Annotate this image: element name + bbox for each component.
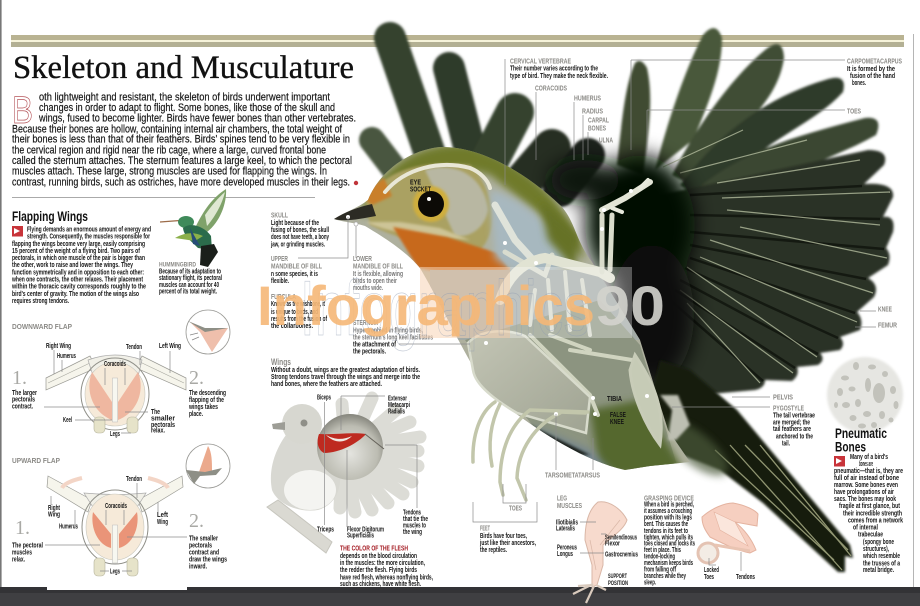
labels: Triceps [317,524,334,534]
note: color of the flesh: in the muscles: the more circulation, [340,558,425,567]
callout: sternum: the attachment of [353,340,396,348]
step 1 text: 1. [15,517,30,539]
callout: skull: fusing of bones, the skull [271,225,329,234]
body text: trabeculae [858,530,883,538]
foot skeletons [473,402,588,500]
labels: Flexor Digitorum [347,524,384,534]
intro paragraph: Because their bones are hollow, containing internal air chambers, the total weight of [12,123,342,135]
label: carpal bones: CARPAL [588,116,609,124]
panel: wings [267,357,433,588]
label: radius: RADIUS [582,106,603,116]
body text: metal bridge. [863,565,894,574]
hummingbird caption: muscles can account for 40 [159,280,219,289]
step 2 text: flapping of the [189,395,224,404]
callout: sternum [353,318,433,356]
callout: carpometacarpus: It is formed by the [847,64,895,73]
body text: bent. This causes the [644,519,688,528]
callout: smaller pectorals: The [151,407,160,416]
body text: branches while they [644,571,686,580]
intro paragraph: called the sternum attaches. The sternum features a large keel, to which the pectoral [12,155,352,167]
body text: tendons in its feet to [644,526,688,535]
labels: Right Wing [46,341,71,350]
hummingbird caption: percent of its total weight. [159,286,217,296]
body text: from falling off [644,564,676,574]
callout: pygostyle: The tail vertebrae [773,410,815,420]
heading: MUSCLES [557,501,582,510]
callout: upper mandible: UPPER [271,254,288,263]
labels: Locked [704,565,719,574]
labels: Toes [704,572,714,581]
callout: skull: Light because of the [271,218,319,227]
intro paragraph: oth lightweight and resistant, the skeleton of birds underwent important [39,92,330,104]
labels: Keel [63,415,72,424]
body text: hand bones, where the feathers are attached. [271,379,382,388]
labels [46,341,181,438]
step 2 text: wings takes [188,402,218,411]
drop cap: B [12,90,33,132]
labels: Peroneus [557,542,577,552]
step 2 text: contract and [189,548,219,556]
sternum [468,331,590,433]
labels: Longus [557,549,573,558]
bottom dark band [0,587,920,606]
main bird illustration [330,28,894,572]
leader lines [580,522,606,553]
body text [271,365,420,388]
callout: carpometacarpus: fusion of the hand [850,71,895,80]
step 1 text: pectorals [12,394,35,404]
intro paragraph: changes in order to adapt to flight. Some bones, like those of the skull and [39,102,335,114]
callout: skull [270,210,329,248]
labels: Left Wing [159,341,181,350]
note: color of the flesh [340,544,433,588]
labels: the wing [403,527,422,536]
labels: Legs [110,566,120,576]
panel: flapping wings [11,189,226,305]
intro paragraph: contrast, running birds, such as ostriches, have more developed muscles in their legs. [12,176,350,188]
callout: smaller pectorals: smaller [151,414,175,422]
note: color of the flesh: have red flesh, whereas nonflying birds, [340,572,433,581]
eye [413,186,449,222]
on-bird labels: FALSE [610,410,626,419]
heading: DOWNWARD FLAP [12,322,72,331]
step 2 text: inward. [189,562,207,570]
icon: arrow [834,456,845,466]
body text: Many of a bird's [850,452,888,461]
labels: SUPPORT [608,573,627,580]
body text: the other, work to raise and lower the wings. They [12,260,134,269]
right page rule [913,34,914,590]
inset: bird in downstroke [186,310,230,354]
heading: Bones [835,440,866,454]
callout text: FEET [480,524,490,532]
callout: cervical vertebrae [510,56,608,80]
callout: smaller pectorals [151,407,175,434]
step 1 text: relax. [12,554,25,564]
labels: Iliotibialis [556,518,578,526]
panel: leg muscles [556,494,638,603]
callout: upper mandible: MANDIBLE OF BILL [271,262,322,270]
labels: Wing [157,517,168,526]
body text: flapping the wings become very large, easily comprising [12,239,145,248]
panel: head callouts [270,210,470,356]
label: ulna: ULNA [599,136,613,144]
callout: upper mandible: flexible. [271,276,289,285]
body text [644,500,695,587]
callout: furcula: results from the fusion of [271,314,327,323]
step 2 text [189,510,227,570]
panel: upward flap [12,444,230,576]
body text: bones are [859,459,873,468]
callout: cervical vertebrae: type of bird. They make the neck flexible. [510,71,608,80]
hummingbird caption: HUMMINGBIRD [159,262,196,268]
label: knee: KNEE [878,304,892,314]
callout text [479,524,536,554]
diagram: upstroke thorax [45,476,187,576]
label: humerus: HUMERUS [574,94,601,102]
left page edge [0,0,2,590]
body text: which resemble [862,551,900,560]
heading: GRASPING DEVICE [644,494,694,502]
step 1 text: 1. [12,367,27,389]
labels: Coracoids [104,359,126,368]
joint markers [346,189,649,416]
note: color of the flesh: the redder the flesh. Flying birds [340,565,417,574]
labels: Right [48,503,60,512]
step 2 text [188,367,226,418]
labels: Biceps [317,392,331,402]
illustration: locked foot [698,503,758,571]
label: carpal bones: BONES [588,124,606,132]
step 2 text: 2. [189,510,204,532]
callout: furcula [271,292,327,330]
heading [835,426,887,454]
labels: Extensor [388,394,407,402]
body text: When a bird is perched, [644,500,694,508]
hummingbird caption: stationary flight, its pectoral [159,273,222,282]
step 1 text: The pectoral [12,540,43,550]
callout: sternum: the pectorals. [353,346,386,356]
panel: grasping device [644,494,758,587]
on-bird labels: SOCKET [410,184,431,194]
body text: tendon-locking [644,552,675,561]
callout: lower mandible [353,254,403,292]
heading: Wings [271,357,291,367]
labels: Semitendinosus [605,532,637,542]
title: Skeleton and Musculature [13,50,354,86]
callout: furcula: FURCULA [271,292,296,301]
top double band [11,35,904,47]
illustration: leg [573,502,627,603]
spine and pelvis teeth [660,395,690,440]
note: color of the flesh: THE COLOR OF THE FLESH [340,544,408,552]
callout: pygostyle: tail. [782,438,790,448]
heading: Flapping Wings [12,209,88,224]
callout: cervical vertebrae: Their number varies according to the [510,64,598,72]
watermark: Infographics [257,274,595,337]
callout text: just like their ancestors, [479,538,536,547]
callout: lower mandible: LOWER [353,254,372,263]
illustration: grey robin with wing [267,398,420,553]
labels: Wing [48,510,60,518]
callout: carpometacarpus [847,56,902,87]
labels: Left [157,510,168,519]
toes bracket: TOES [509,504,522,512]
labels: Legs [110,429,120,438]
body text [11,224,151,305]
labels: muscles to [403,520,426,530]
watermark: Infographics [300,264,590,352]
body text: pectorals, in which one muscle of the pair is bigger than [12,253,145,262]
callout: lower mandible: mouths wide. [353,283,383,292]
on-bird labels: KNEE [610,417,624,426]
labels: that tie the [403,514,428,523]
body text: structures), [863,544,889,553]
callout: upper mandible [271,254,322,285]
intro paragraph: the cervical region and rigid near the rib cage, where a large, curved frontal bone [12,144,326,156]
hummingbird caption: Because of its adaptation to [159,266,221,276]
note: color of the flesh: such as chickens, have white flesh. [340,579,421,588]
labels [317,392,428,540]
labels: Flexor [605,538,620,548]
body text: 15 percent of the weight of a flying bird. Two pairs of [12,246,140,255]
labels: Tendon [126,474,142,483]
callout: furcula: is unique to birds, and [271,307,318,316]
body text: it assumes a crouching [644,506,692,515]
icon: arrow [12,226,23,236]
body text: function symmetrically and in opposition to each other: [12,267,144,276]
main wing feathers [617,28,894,395]
body text: Strong tendons travel through the wings and merge into the [271,372,420,381]
labels: Lateralis [556,524,575,532]
intro paragraph [12,90,356,188]
labels [704,565,755,581]
body text: Without a doubt, wings are the greatest adaptation of birds. [271,365,420,374]
body text [834,452,904,574]
on-bird labels: TIBIA [607,394,622,403]
heading: LEG [557,494,567,502]
callout: pygostyle: anchored to the [776,432,813,440]
body text: mechanism keeps birds [644,558,693,567]
callout: sternum: the sternum's long keel facilitates [353,332,433,342]
body text: sleep. [644,578,656,587]
labels [48,474,168,576]
leader lines [324,396,417,527]
callout: pygostyle: PYGOSTYLE [773,404,804,412]
back feathers behind head [372,38,588,190]
label: femur: FEMUR [878,320,897,330]
callout text: Birds have four toes, [480,531,527,540]
body text: requires strong tendons. [12,296,69,305]
callout: lower mandible: It is flexible, allowing [353,269,403,278]
labels: Tendon [126,342,142,351]
watermark: 90 [595,274,665,337]
panel: downward flap [12,310,230,438]
callout: lower mandible: birds to open their [353,276,397,285]
white panel under upward flap diagram [47,560,187,590]
on-bird labels: EYE [410,178,421,186]
feather shafts [663,130,890,383]
body text: tighten, which pulls its [644,532,693,541]
body text: Flying demands an enormous amount of energy and [27,224,151,234]
callout: furcula: Known as the wishbone, it [271,299,325,308]
beak [334,204,376,220]
step 1 text: The larger [12,388,37,397]
callout: furcula: the collarbones. [271,321,313,330]
labels [556,518,638,587]
step 1 text [12,367,37,410]
callout: sternum: STERNUM [353,318,378,327]
label: pelvis: PELVIS [773,392,793,402]
label: toes: TOES [847,106,861,116]
heading: UPWARD FLAP [12,456,60,465]
body text: bird's center of gravity. The motion of the wings also [12,289,139,298]
step 2 text: 2. [189,367,204,389]
step 1 text: muscles [12,548,32,556]
callout: pygostyle [773,404,815,448]
labels: Humerus [59,522,78,530]
callout: smaller pectorals: relax. [151,426,165,434]
body text: (spongy bone [863,537,894,546]
callout: upper mandible: n some species, it is [271,269,318,278]
panel: wing bone labels [505,56,902,470]
labels: Metacarpi [388,400,410,409]
step 1 text [12,517,43,564]
hummingbird caption [159,262,222,296]
step 2 text: pectorals [189,540,212,550]
intro paragraph: wings, fused to become lighter. Birds have fewer bones than other vertebrates. [38,113,356,125]
feather gaps [670,186,884,381]
labels: Gastrocnemius [605,550,638,558]
label: coracoids: CORACOIDS [535,84,567,92]
callout: lower mandible: MANDIBLE OF BILL [353,262,403,270]
label: tarsometatarsus: TARSOMETATARSUS [545,470,600,480]
labels: Superficialis [347,530,374,540]
intro paragraph: muscles attach. These large, strong muscles are used for flapping the wings. In [12,165,327,177]
heading [557,494,582,510]
callout: smaller pectorals: pectorals [151,420,175,429]
callout: skull: does not have teeth, a bony [271,232,329,241]
body text: feet in place. This [644,545,681,554]
note: color of the flesh: depends on the blood circulation [340,551,417,560]
intro paragraph: their bones is less than that of their feathers. Birds' spines tend to be very flexible in [12,134,350,146]
callout: cervical vertebrae: CERVICAL VERTEBRAE [510,56,571,66]
labels: Radialis [388,406,405,416]
diagram: downstroke thorax [44,350,186,433]
illustration: spongy bone [827,357,903,433]
callout text: the reptiles. [480,545,507,554]
end bullet [354,181,358,185]
skeleton [385,165,661,445]
callout: pygostyle: tail feathers are [773,424,811,433]
panel: feet [473,470,600,554]
callout: pygostyle: are merged; the [773,418,810,426]
inset: bird in upstroke [186,444,230,488]
callout: skull: jaw, or grinding muscles. [270,240,325,248]
step 2 text: draw the wings [189,554,227,564]
step 1 text: contract. [12,402,33,410]
body text: position with its legs [644,513,692,522]
callout: skull: SKULL [271,210,288,220]
callout: sternum: Hypertrophied in flying birds, [353,326,423,334]
step 2 text: The descending [189,388,226,397]
tail feathers [640,360,853,572]
bird body and head [330,140,690,480]
heading: Pneumatic [835,426,887,441]
on-bird labels [410,178,626,426]
body text: within the thoracic cavity corresponds roughly to the [11,282,146,291]
body text: toes closed and locks its [644,539,695,548]
step 2 text: The smaller [189,534,218,542]
body text: strength. Consequently, the muscles responsible for [27,232,150,241]
callout: carpometacarpus: bones. [852,78,866,87]
labels: Coracoids [105,501,127,510]
icon: hummingbird [160,189,226,267]
body text: when one contracts, the other relaxes. Their placement [11,274,143,284]
body text: the trusses of a [863,558,901,568]
panel: pneumatic bones [827,357,904,574]
body text: of internal [853,522,878,532]
dark wing base [550,155,695,385]
label: carpal bones [588,116,609,132]
labels: POSITION [608,580,628,587]
step 2 text: place. [189,409,203,418]
labels: Humerus [57,351,76,360]
labels: Tendons [403,508,421,516]
labels: Tendons [736,572,755,581]
